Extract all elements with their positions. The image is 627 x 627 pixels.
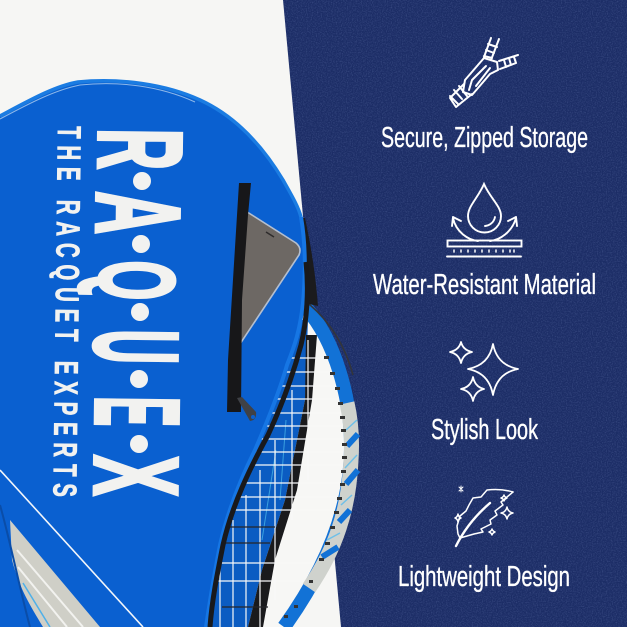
bag right edge [206, 217, 305, 627]
letter R: R [73, 128, 207, 171]
letter E: E [69, 396, 203, 427]
tennis racquet [208, 304, 360, 627]
bag top seam [0, 81, 301, 217]
logo wordmark [68, 128, 207, 497]
icon: water drop on fabric [447, 184, 522, 256]
racquet strings [218, 340, 316, 627]
feature: water resistant [373, 184, 596, 301]
logo dots [130, 172, 151, 453]
letter A: A [70, 191, 205, 235]
tagline: THE RACQUET EXPERTS [46, 126, 88, 497]
pocket zipper [227, 183, 251, 412]
bag seam highlight [0, 84, 195, 119]
bottom graphic band [10, 520, 100, 627]
back zipper strip [298, 218, 318, 306]
band white stripes [17, 550, 83, 627]
icon: zipper [450, 38, 518, 107]
letter Q: Q [77, 260, 197, 301]
frame blue accents [322, 434, 358, 557]
icon: sparkles [450, 342, 518, 401]
feature: stylish look [431, 342, 538, 446]
main zipper [210, 262, 307, 627]
white diagonal line [0, 470, 143, 627]
label: stylish look: Stylish Look [431, 414, 538, 446]
feature: lightweight design [398, 486, 570, 593]
feature: secure storage [381, 38, 588, 154]
frame outer edge [309, 304, 353, 375]
white paper panel [0, 0, 341, 627]
racquet frame [284, 308, 351, 627]
bag body [0, 81, 305, 627]
grommets [284, 356, 347, 618]
zipper pull [237, 397, 256, 421]
band blue stripe [23, 583, 50, 627]
phone [238, 210, 300, 347]
letter U: U [68, 329, 201, 365]
letter X: X [68, 455, 202, 497]
icon: feather [455, 486, 513, 546]
frame light accents [327, 420, 357, 540]
racquet interior [208, 320, 344, 627]
frame graphic stripes [309, 403, 352, 588]
racquet bag [0, 81, 307, 627]
left seam [0, 505, 30, 627]
phone speaker [266, 232, 274, 237]
